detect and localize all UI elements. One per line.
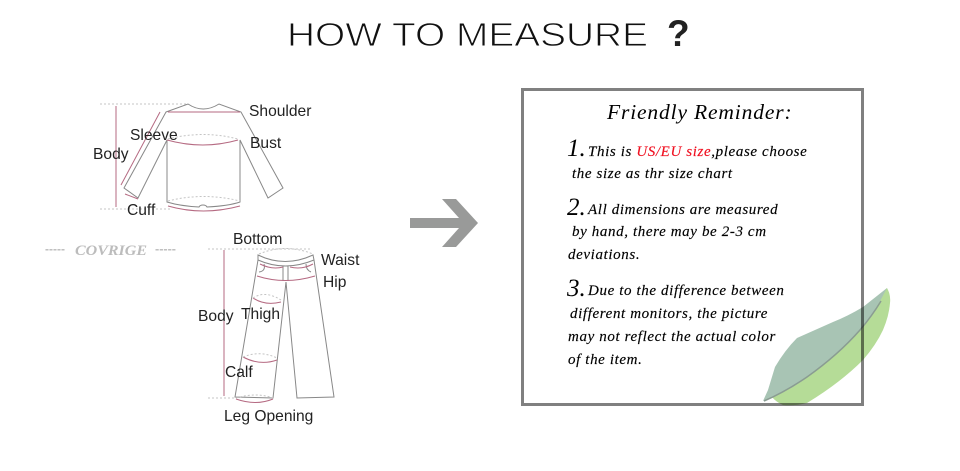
label: Bust: Bust	[250, 135, 282, 152]
title	[287, 13, 690, 54]
note 1	[567, 135, 807, 182]
note 2: deviations.	[568, 247, 640, 263]
note 3	[566, 275, 785, 368]
note 2	[567, 194, 778, 263]
arrow	[410, 199, 478, 247]
note 3: of the item.	[568, 352, 643, 368]
watermark: COVRIGE: -----	[45, 242, 65, 256]
icon: leaf	[763, 288, 890, 405]
label: Body: Body	[198, 308, 234, 325]
sweater diagram	[93, 103, 311, 219]
watermark: COVRIGE: -----	[155, 242, 176, 256]
title: HOW TO MEASURE	[287, 16, 648, 53]
note 2: by hand, there may be 2-3 cm	[572, 224, 767, 240]
label: Hip: Hip	[323, 274, 347, 291]
panel: friendly reminder	[522, 90, 862, 404]
label: Cuff: Cuff	[127, 202, 156, 219]
note 3: 3.	[566, 275, 586, 302]
note 3: may not reflect the actual color	[568, 329, 776, 345]
note 3: different monitors, the picture	[570, 306, 768, 322]
note 1: 1.	[567, 135, 586, 162]
label: Sleeve: Sleeve	[130, 127, 178, 144]
title: ?	[667, 13, 690, 54]
note 1: This is US/EU size,please choose	[588, 144, 807, 160]
trousers diagram	[198, 231, 360, 425]
label: Leg Opening: Leg Opening	[224, 408, 313, 425]
note 2: 2.	[567, 194, 586, 221]
note 3: Due to the difference between	[587, 283, 785, 299]
watermark: COVRIGE	[45, 242, 176, 259]
heading: Friendly Reminder:	[606, 100, 792, 124]
label: Bottom: Bottom	[233, 231, 282, 248]
label: Body: Body	[93, 146, 129, 163]
note 1: the size as thr size chart	[572, 166, 733, 182]
label: Thigh: Thigh	[241, 306, 280, 323]
note 2: All dimensions are measured	[587, 202, 778, 218]
watermark: COVRIGE: COVRIGE	[75, 243, 147, 259]
label: Calf: Calf	[225, 364, 253, 381]
label: Shoulder: Shoulder	[249, 103, 311, 120]
label: Waist: Waist	[321, 252, 360, 269]
